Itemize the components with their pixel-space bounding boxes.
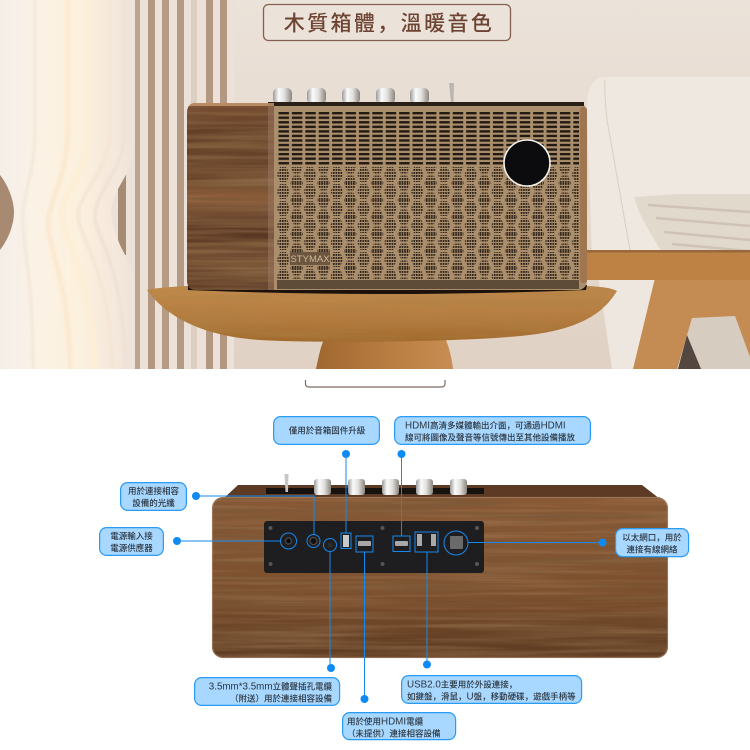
knobs and switch xyxy=(273,83,454,104)
cabinet xyxy=(212,485,668,658)
callout: DC power xyxy=(100,528,296,555)
round display xyxy=(504,140,550,186)
callout: USB 2.0: USB2.0主要用於外設連接， xyxy=(407,680,517,690)
callout: HDMI cable xyxy=(343,536,456,740)
walnut side panel xyxy=(187,103,274,290)
callout: 3.5mm audio: 3.5mm*3.5mm立體聲插孔電纜 xyxy=(209,682,332,692)
badge: STYMAX xyxy=(290,254,330,265)
wall xyxy=(234,0,750,369)
callout: ethernet xyxy=(444,529,689,557)
callout: HDMI cable: （未提供）連接相容設備 xyxy=(347,728,441,738)
front speaker xyxy=(187,83,587,290)
callout: ethernet: 連接有線網絡 xyxy=(626,544,678,554)
cushion xyxy=(634,194,750,256)
callout: HDMI output: 線可將圖像及聲音等信號傳出至其他設備播放 xyxy=(405,432,576,442)
title xyxy=(264,4,510,40)
callout: HDMI output xyxy=(393,417,590,552)
chair frame xyxy=(584,250,750,369)
port panel xyxy=(264,521,484,573)
callout: 3.5mm audio xyxy=(195,538,340,705)
callout: HDMI cable: 用於使用HDMI電纜 xyxy=(347,716,424,728)
armchair xyxy=(584,77,750,369)
callout: HDMI output: HDMI高清多媒體輸出介面，可通過HDMI xyxy=(405,420,566,432)
callout: 3.5mm audio: （附送）用於連接相容設備 xyxy=(230,694,332,704)
grille xyxy=(262,103,587,290)
title: 木質箱體，溫暖音色 xyxy=(284,12,494,36)
callout: DC power: 電源輸入接 xyxy=(110,531,153,541)
callout: USB 2.0 xyxy=(402,532,582,703)
callout: ethernet: 以太網口，用於 xyxy=(622,532,682,542)
top knobs and switch xyxy=(266,474,484,495)
lower pillow xyxy=(675,316,750,369)
wooden table xyxy=(147,285,617,369)
callout: DC power: 電源供應器 xyxy=(110,543,153,553)
callout: USB 2.0: 如鍵盤，滑鼠，U盤，移動硬碟，遊戲手柄等 xyxy=(407,692,576,702)
callout: optical: 用於連接相容 xyxy=(128,486,179,496)
callout: optical xyxy=(121,483,320,548)
rear speaker xyxy=(212,474,668,658)
chair back lower xyxy=(598,280,654,369)
bracket divider xyxy=(306,380,445,387)
callout: firmware USB xyxy=(274,417,379,548)
callout: optical: 設備的光纖 xyxy=(132,498,175,508)
photo: speaker on wooden table in living room xyxy=(0,0,750,375)
slatted wall panel xyxy=(0,0,234,369)
pleated lamp xyxy=(0,0,135,375)
ports xyxy=(286,534,463,549)
callout: firmware USB: 僅用於音箱固件升級 xyxy=(289,426,366,436)
